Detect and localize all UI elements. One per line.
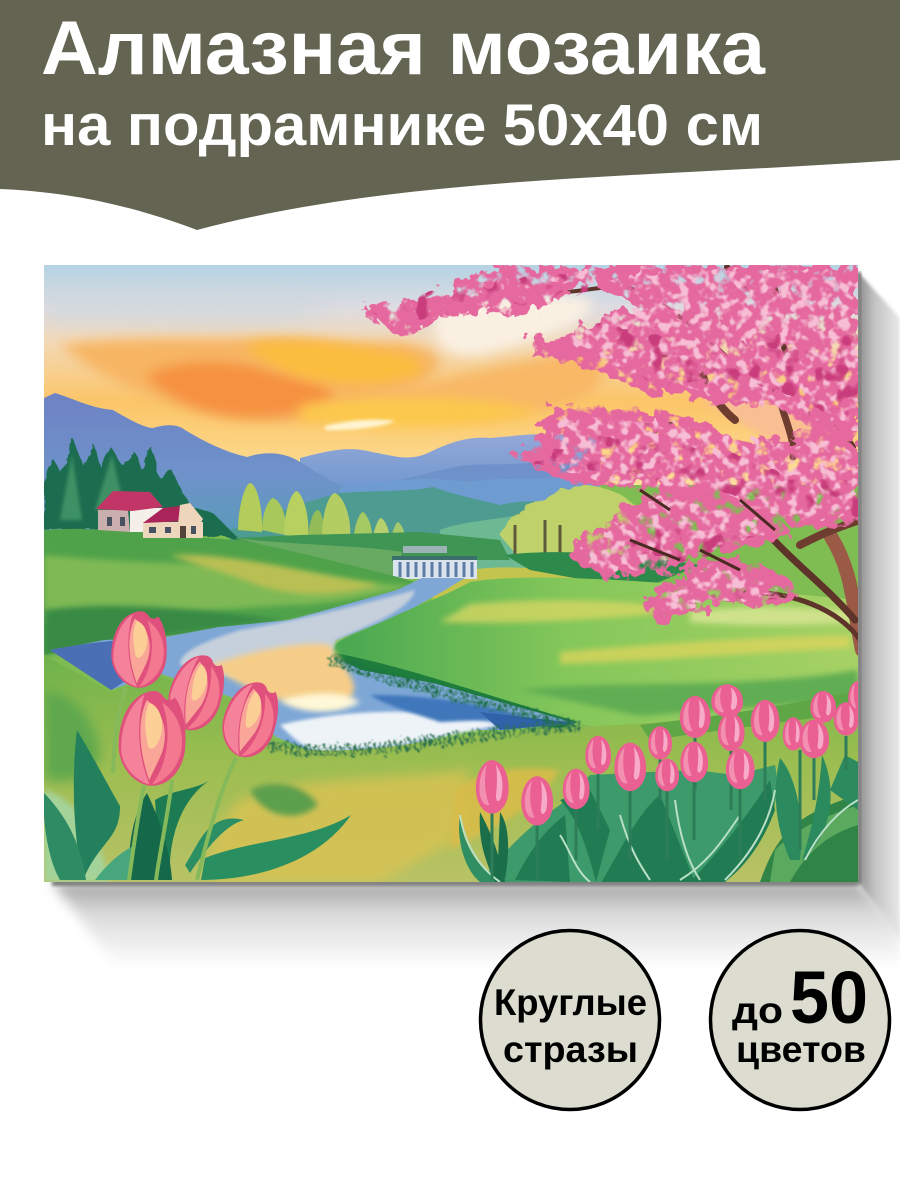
cherry tree trunk and branches — [567, 265, 862, 650]
badge: up to 50 colours: 50 — [790, 956, 868, 1039]
river — [50, 578, 576, 753]
badge: up to 50 colours — [710, 930, 890, 1110]
house — [96, 491, 203, 538]
tree line band — [235, 532, 510, 560]
near mountains — [44, 393, 570, 530]
badge: round rhinestones — [480, 930, 660, 1110]
left bank — [44, 529, 420, 655]
dark forest — [44, 437, 240, 540]
small tulips — [476, 681, 868, 825]
mid-distance trees — [238, 483, 640, 560]
sunset clouds — [44, 284, 840, 470]
foreground meadow — [44, 655, 858, 882]
large tulips — [111, 611, 285, 786]
subtitle: на подрамнике 50х40 см — [41, 93, 763, 158]
canvas shadow — [52, 272, 900, 968]
title: Алмазная мозаика — [41, 6, 766, 91]
tulip leaves left — [44, 688, 351, 880]
teal hills — [230, 487, 540, 540]
distant mountains — [300, 434, 600, 490]
bank grass — [330, 660, 575, 725]
right hill — [432, 567, 576, 600]
badge: round rhinestones: Круглые — [494, 982, 647, 1023]
banner — [0, 0, 900, 230]
painting — [44, 265, 868, 885]
badge: up to 50 colours: до — [732, 990, 783, 1031]
distant field — [236, 538, 402, 576]
waterfall — [392, 546, 477, 579]
overlapping branches — [630, 490, 775, 570]
sky — [44, 265, 858, 485]
right meadow — [326, 578, 858, 728]
tulip leaves right — [459, 736, 858, 885]
badge: round rhinestones: стразы — [503, 1029, 638, 1070]
cherry blossoms — [362, 265, 858, 623]
badge: up to 50 colours: цветов — [736, 1029, 866, 1070]
